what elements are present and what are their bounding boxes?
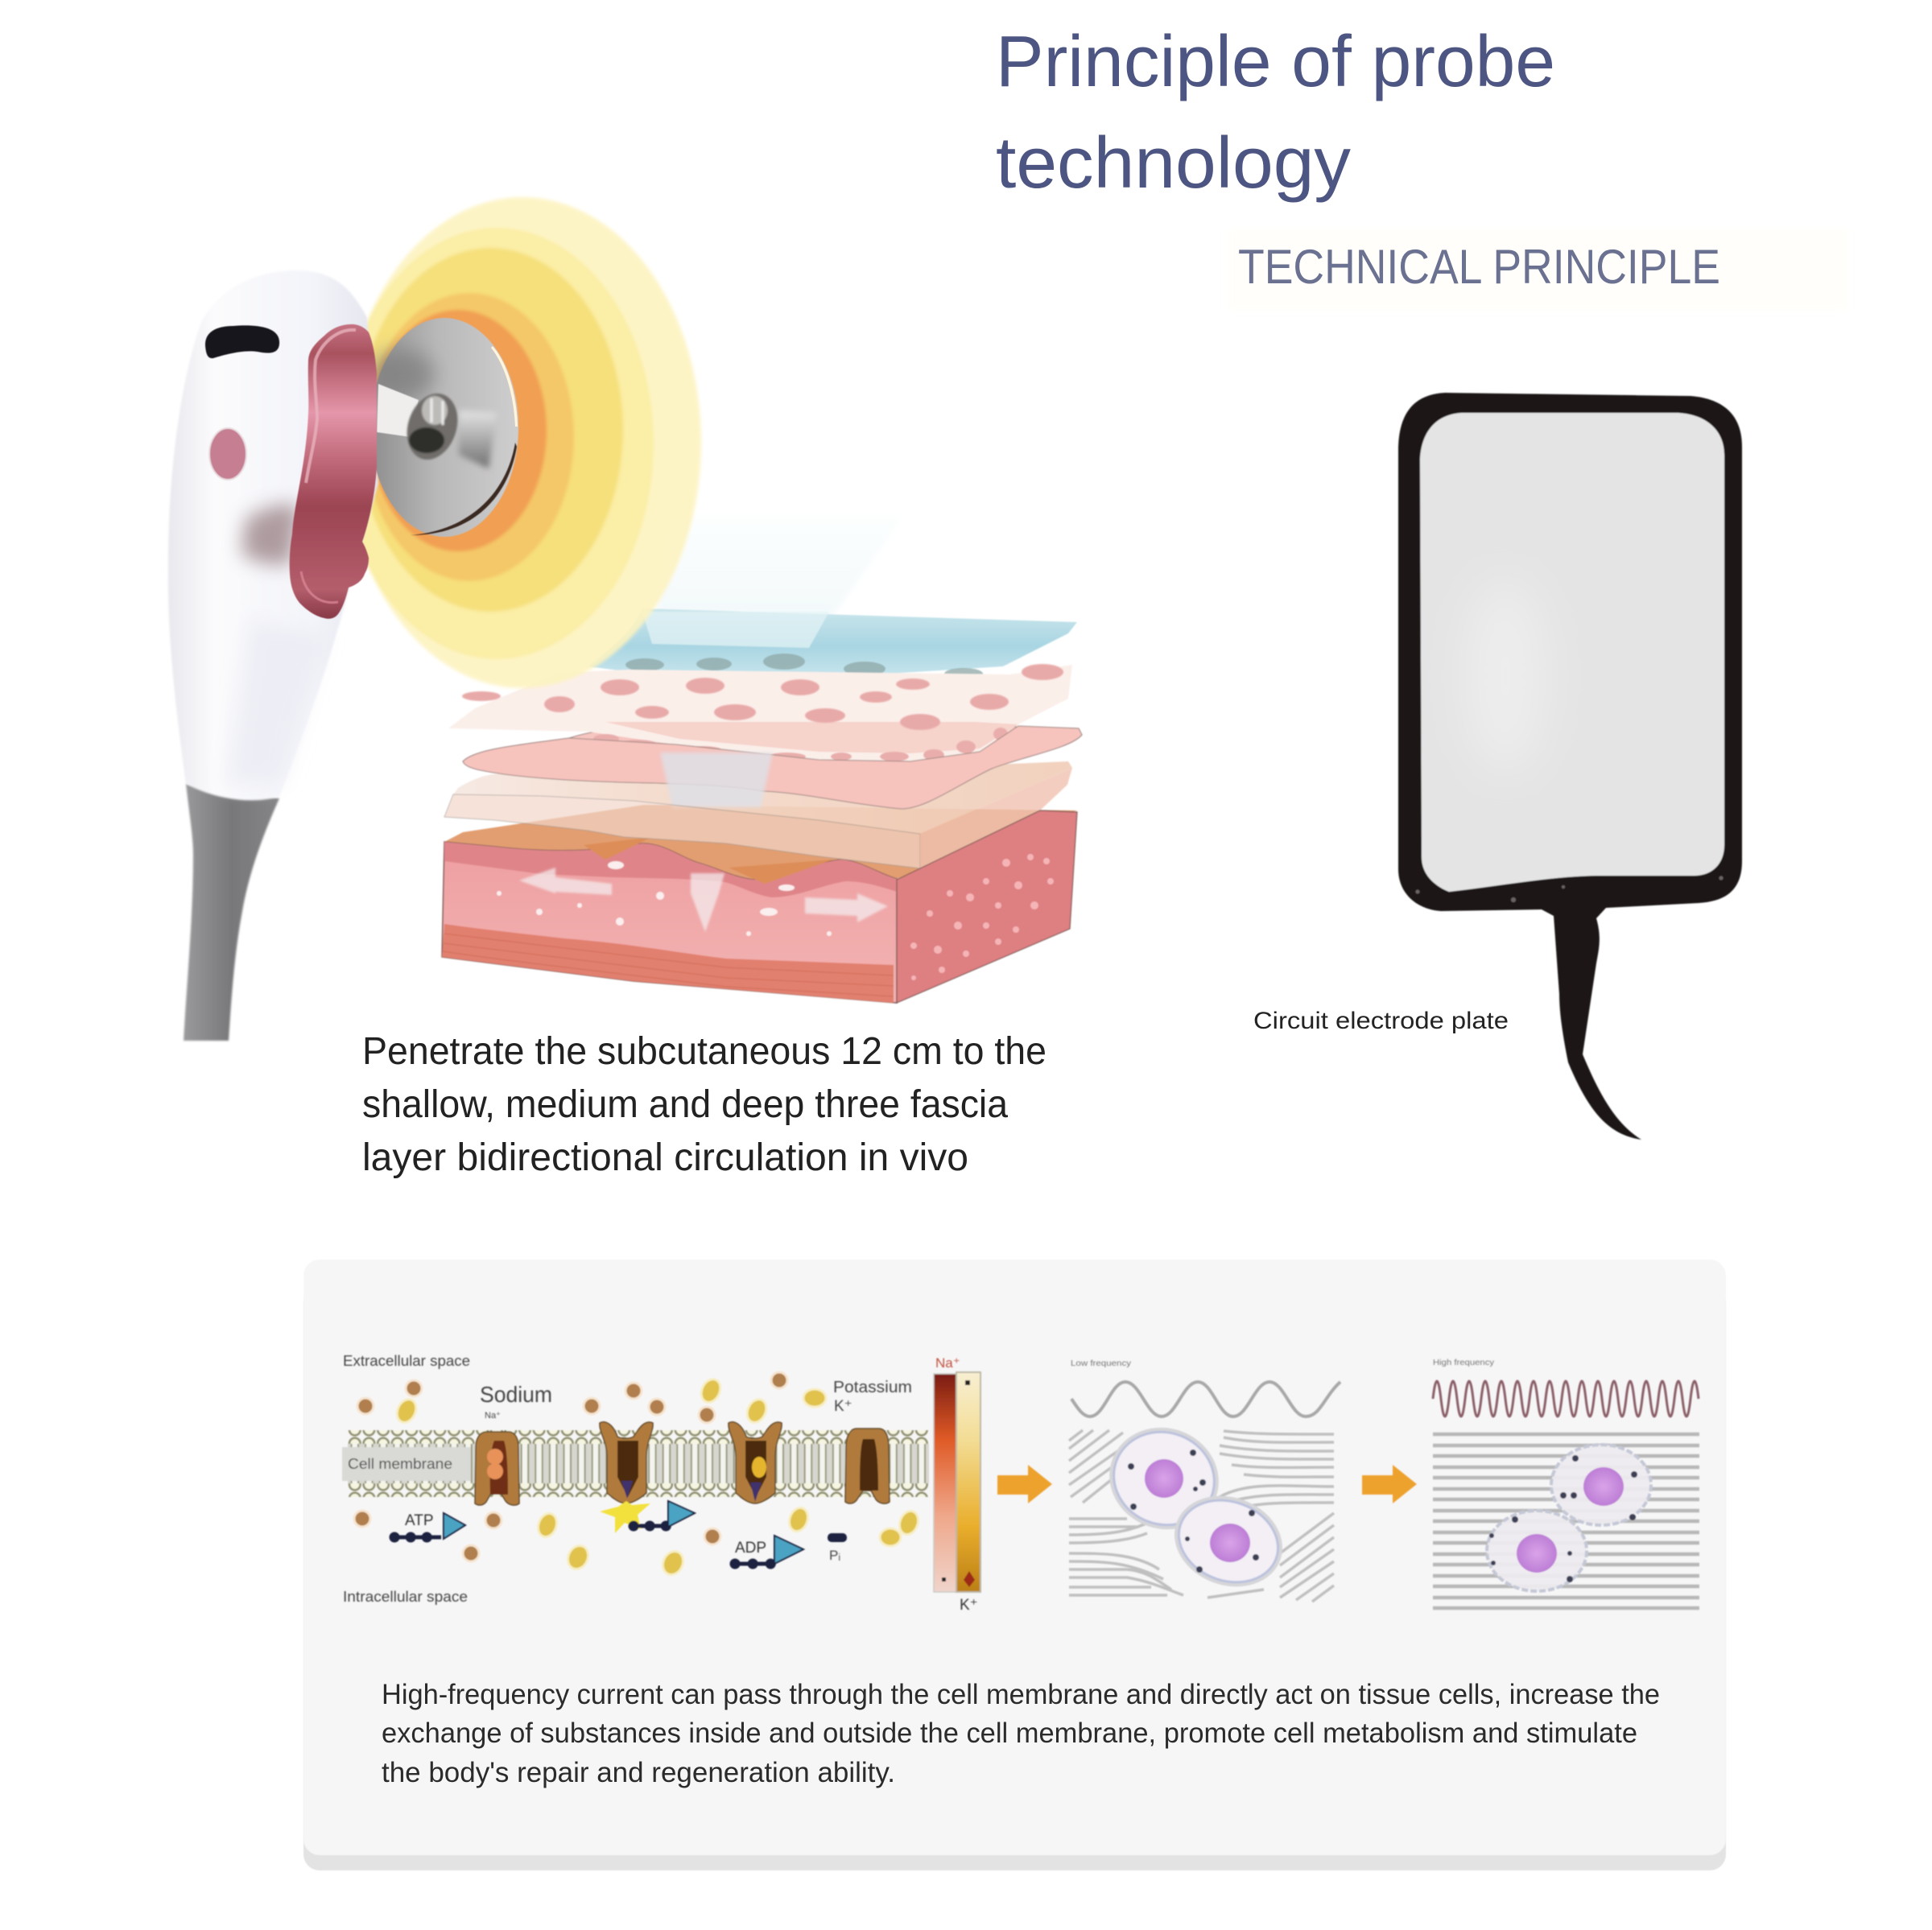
block side face <box>897 810 1077 1003</box>
ADP molecule <box>735 1536 803 1564</box>
electrode plate <box>1398 393 1742 1140</box>
gradient bar labels <box>935 1355 978 1614</box>
panel description: exchange of substances inside and outside the cell membrane, promote cell metabolism and stimulate <box>382 1718 1637 1749</box>
high frequency chart <box>1433 1359 1699 1608</box>
panel: cell explanation <box>303 1260 1726 1870</box>
panel shadow <box>303 1288 1726 1870</box>
disc rim shadow <box>411 443 517 535</box>
dark cells on blue layer <box>625 654 983 679</box>
muscle band <box>442 924 894 1003</box>
cell 3 <box>1551 1445 1651 1525</box>
ADP molecule: ADP <box>735 1540 766 1557</box>
handle caption <box>362 1030 1046 1179</box>
ATP molecule: ATP <box>405 1512 434 1529</box>
orange fat wedge <box>584 837 833 884</box>
parallel field lines <box>1433 1434 1699 1608</box>
side face pores <box>910 854 1054 980</box>
gray cable neck <box>184 784 279 1041</box>
handle caption: Penetrate the subcutaneous 12 cm to the <box>362 1030 1046 1073</box>
energy rings <box>340 197 701 688</box>
translucent fascia front <box>444 794 920 868</box>
cell 1 <box>1097 1415 1231 1542</box>
plate soft highlight <box>1465 579 1546 773</box>
potassium gradient bar <box>956 1372 980 1592</box>
ATP molecule at pump <box>634 1501 695 1527</box>
cell membrane label <box>342 1447 471 1481</box>
cell 2 <box>1164 1484 1293 1598</box>
panel description: High-frequency current can pass through the cell membrane and directly act on tissue cells, increase the <box>382 1679 1660 1710</box>
block front face <box>442 842 897 1003</box>
plate outer frame and cable <box>1398 393 1742 1140</box>
metal electrode disc <box>370 318 518 537</box>
pink cell nuclei <box>462 664 1063 730</box>
stem knob highlight <box>459 410 497 468</box>
panel background <box>303 1260 1726 1855</box>
translucent fascia side <box>920 768 1072 868</box>
sodium label <box>480 1382 552 1421</box>
pink dermis layer <box>463 720 1082 809</box>
circulation arrows <box>519 868 888 932</box>
membrane diagram <box>342 1353 980 1614</box>
bright vesicles <box>497 861 832 936</box>
gray plate surface <box>1420 413 1724 892</box>
low frequency chart <box>1069 1359 1340 1602</box>
gradient bar labels: Na⁺ <box>935 1355 960 1371</box>
dermal band <box>444 842 897 897</box>
high frequency label: High frequency <box>1433 1359 1494 1367</box>
pale band behind subtitle <box>1228 229 1847 310</box>
electrode caption: Circuit electrode plate <box>1253 1008 1509 1034</box>
cell 4 <box>1487 1511 1587 1591</box>
potassium ions <box>394 1376 921 1578</box>
scalloped lower edge of cell layer <box>593 728 1008 761</box>
potassium label: K⁺ <box>834 1398 852 1415</box>
blue epidermis layer <box>588 608 1077 684</box>
beam over blue layer <box>642 612 829 648</box>
muscle fibres <box>443 934 894 996</box>
ion channel 1 <box>475 1432 519 1505</box>
space labels: Extracellular space <box>343 1353 470 1369</box>
disturbed field lines <box>1069 1430 1334 1602</box>
rose metal cap <box>290 324 377 619</box>
lavender lower facet <box>225 620 326 785</box>
power button <box>209 428 246 480</box>
space labels <box>343 1353 470 1605</box>
disc shading <box>370 350 435 398</box>
gradient bar labels: K⁺ <box>960 1597 978 1614</box>
panel description <box>382 1679 1660 1788</box>
light beam <box>652 515 906 648</box>
cellular layer <box>448 665 1072 761</box>
skin layers diagram <box>442 515 1082 1003</box>
sodium ions <box>354 1372 787 1561</box>
rose cap lower rim <box>301 571 338 603</box>
ion channel 2 <box>600 1422 653 1503</box>
title: technology <box>996 123 1351 204</box>
title: Principle of probe <box>996 22 1555 102</box>
arrow 1 <box>997 1465 1052 1503</box>
ion channel 4 <box>845 1429 890 1503</box>
panel description: the body's repair and regeneration ability. <box>382 1757 895 1788</box>
cell membrane label: Cell membrane <box>348 1456 452 1472</box>
high frequency wave <box>1433 1381 1699 1417</box>
ATP molecule <box>394 1512 465 1539</box>
pink dermis re-lay <box>463 726 1082 809</box>
low frequency wave <box>1071 1382 1340 1417</box>
probe handle <box>168 270 518 1041</box>
arrow 2 <box>1362 1465 1417 1503</box>
handle caption: layer bidirectional circulation in vivo <box>362 1136 968 1179</box>
rose cap rim <box>306 330 356 483</box>
sodium label: Na⁺ <box>485 1411 501 1421</box>
sodium label: Sodium <box>480 1382 552 1407</box>
sodium gradient bar <box>934 1374 956 1592</box>
disc right highlight rim <box>491 346 518 427</box>
electrode shaft <box>377 384 419 437</box>
block top surface <box>444 805 1077 880</box>
display slot <box>205 325 279 358</box>
plate rivets <box>1415 876 1723 902</box>
phosphate group <box>828 1533 847 1563</box>
body shadow <box>242 505 299 565</box>
beam through dermis <box>660 753 773 807</box>
title <box>996 22 1555 204</box>
subtitle: TECHNICAL PRINCIPLE <box>1238 240 1720 294</box>
translucent pink band under cells <box>605 722 1018 753</box>
potassium label <box>833 1379 912 1415</box>
space labels: Intracellular space <box>343 1589 468 1605</box>
lipid bilayer <box>348 1430 929 1497</box>
translucent fascia top <box>453 761 1072 834</box>
phosphate group: Pᵢ <box>829 1548 840 1563</box>
handle caption: shallow, medium and deep three fascia <box>362 1083 1008 1126</box>
shaft collar <box>398 387 466 466</box>
low frequency label: Low frequency <box>1071 1359 1131 1368</box>
white handle body <box>168 270 378 800</box>
ATP energy spark <box>600 1501 650 1533</box>
potassium label: Potassium <box>833 1379 912 1396</box>
ion channel 3 <box>729 1422 782 1503</box>
